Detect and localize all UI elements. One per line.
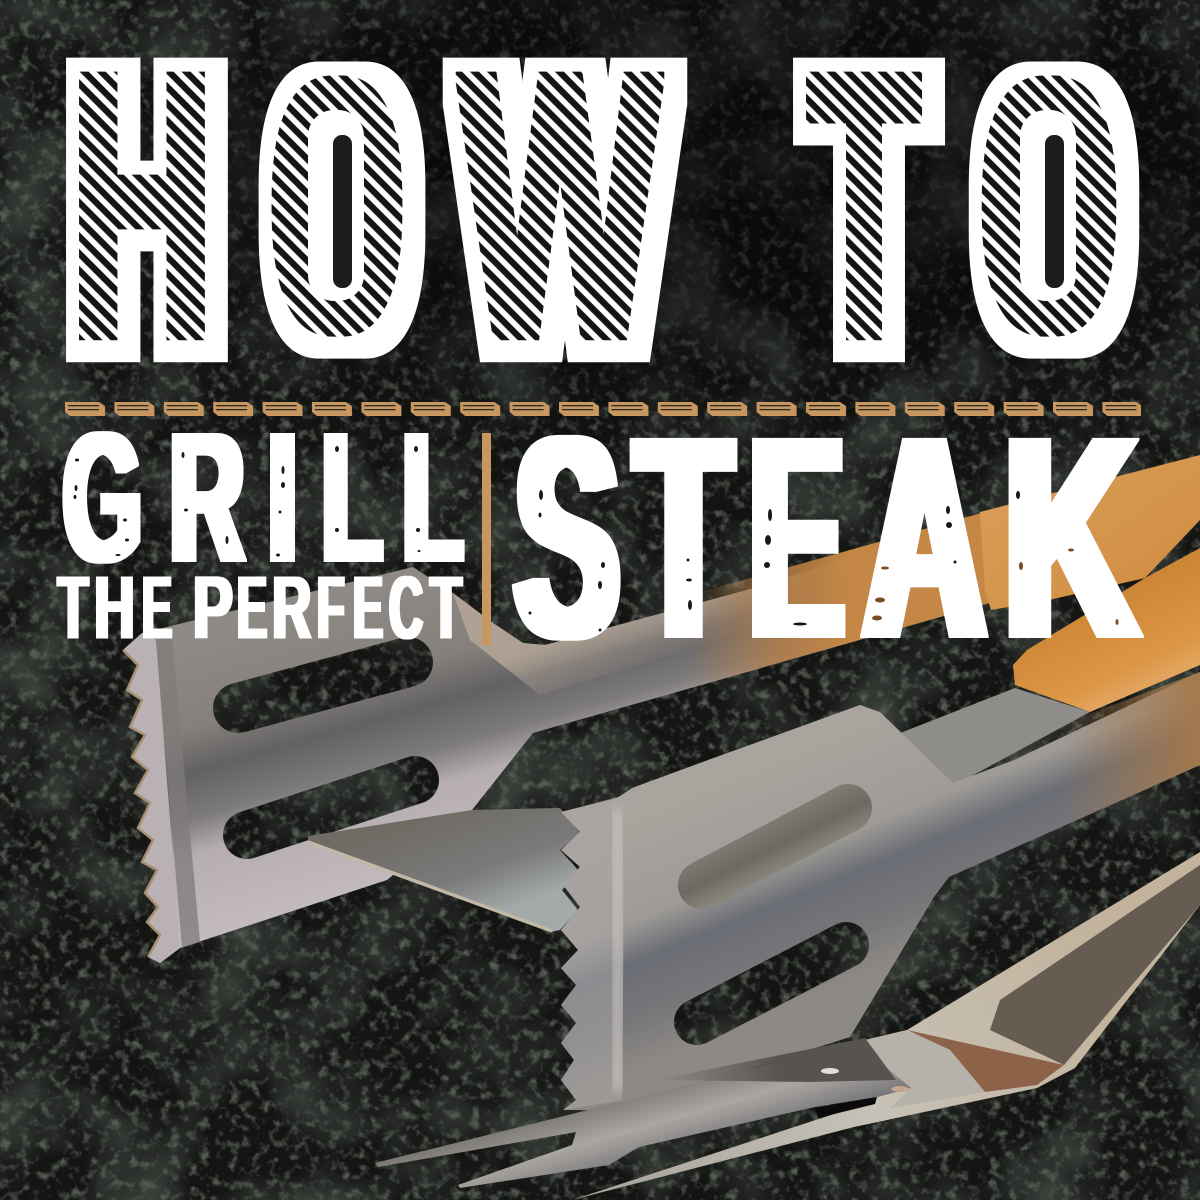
headline: STEAK: S	[515, 378, 619, 699]
title: HOW TO, outlined striped letters: O	[978, 21, 1120, 440]
title: HOW TO, outlined striped letters: T	[809, 0, 919, 416]
headline: STEAK: T	[636, 377, 731, 699]
tan vertical divider	[482, 433, 491, 645]
rear blade of the spatula	[308, 808, 580, 932]
title: HOW TO, outlined striped letters: H	[71, 0, 213, 415]
subtitle: THE PERFECT: F	[317, 559, 345, 659]
headline: STEAK: A	[864, 377, 985, 698]
upper wood handle	[980, 455, 1200, 610]
second tool handle: wood and metal	[890, 548, 1200, 785]
inner wall and counter of first O	[308, 110, 364, 301]
subtitle: THE PERFECT: T	[430, 556, 462, 658]
inner wall and counter of second O	[1020, 110, 1076, 301]
subtitle: GRILL: I	[268, 393, 297, 600]
fork tines band	[375, 1040, 911, 1188]
subtitle: GRILL: G	[63, 394, 142, 601]
rear metal strip	[890, 688, 1090, 785]
spatula head with teeth and slots	[561, 672, 1200, 1110]
subtitle: GRILL: R	[170, 394, 244, 601]
upper slot showing blade behind	[702, 808, 848, 885]
subtitle: THE PERFECT: R	[272, 557, 311, 658]
subtitle: THE PERFECT: T	[58, 558, 88, 658]
title: HOW TO, outlined striped letters: W	[460, 0, 662, 415]
subtitle: THE PERFECT	[58, 556, 462, 659]
subtitle: THE PERFECT: C	[389, 558, 423, 659]
subtitle: THE PERFECT: H	[94, 557, 135, 658]
headline: STEAK	[515, 377, 1138, 699]
subtitle: THE PERFECT: E	[237, 559, 267, 659]
title: HOW TO, outlined striped letters: O	[269, 21, 405, 440]
headline: STEAK: K	[1004, 378, 1138, 699]
brown specks over the wood	[872, 548, 1118, 625]
head and shaft	[561, 672, 1200, 1110]
distressed ink specks on lettering	[74, 446, 1020, 632]
barbecue fork with tines	[375, 852, 1200, 1200]
subtitle: GRILL: L	[403, 395, 463, 601]
subtitle: THE PERFECT: E	[142, 559, 172, 659]
subtitle: THE PERFECT: P	[193, 558, 233, 659]
tan dashed divider	[65, 401, 1141, 417]
title: HOW TO, outlined striped letters	[66, 58, 1140, 362]
subtitle: GRILL: L	[322, 395, 382, 601]
headline: STEAK: E	[751, 377, 843, 698]
lower wood handle	[1013, 548, 1200, 712]
subtitle: GRILL	[63, 393, 463, 601]
upper tongs tool with slotted head and wood handle	[123, 455, 1200, 963]
fork body	[572, 852, 1200, 1200]
tongs metal head and shaft	[123, 512, 1000, 963]
subtitle: THE PERFECT: E	[353, 559, 383, 659]
